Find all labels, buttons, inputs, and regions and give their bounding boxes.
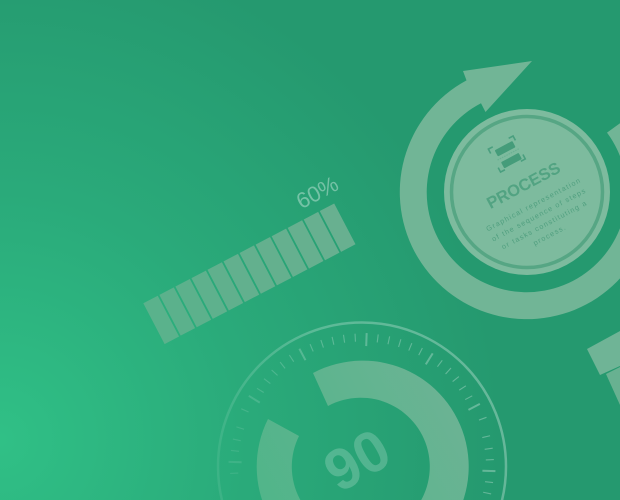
process icon: [488, 136, 525, 172]
percentage label: 60%: [292, 171, 343, 214]
heading: PROCESS: [484, 159, 564, 213]
description text: Graphical representation: [485, 175, 583, 233]
progress bar: [143, 171, 355, 344]
process circle: [444, 109, 610, 275]
partially visible box: [587, 331, 620, 405]
minor ticks: [230, 329, 498, 494]
outer ring: [218, 322, 506, 500]
gauge: [218, 322, 506, 500]
segments: [143, 204, 355, 344]
donut arc: [257, 361, 469, 500]
description text: process.: [532, 222, 568, 247]
description text: or tasks constituting a: [500, 198, 589, 251]
inner ring: [452, 116, 602, 268]
process label group: [454, 118, 599, 264]
description text: [485, 175, 599, 264]
circular arrow: [400, 61, 620, 319]
description text: of the sequence of steps: [490, 186, 588, 243]
major ticks: [229, 328, 500, 471]
